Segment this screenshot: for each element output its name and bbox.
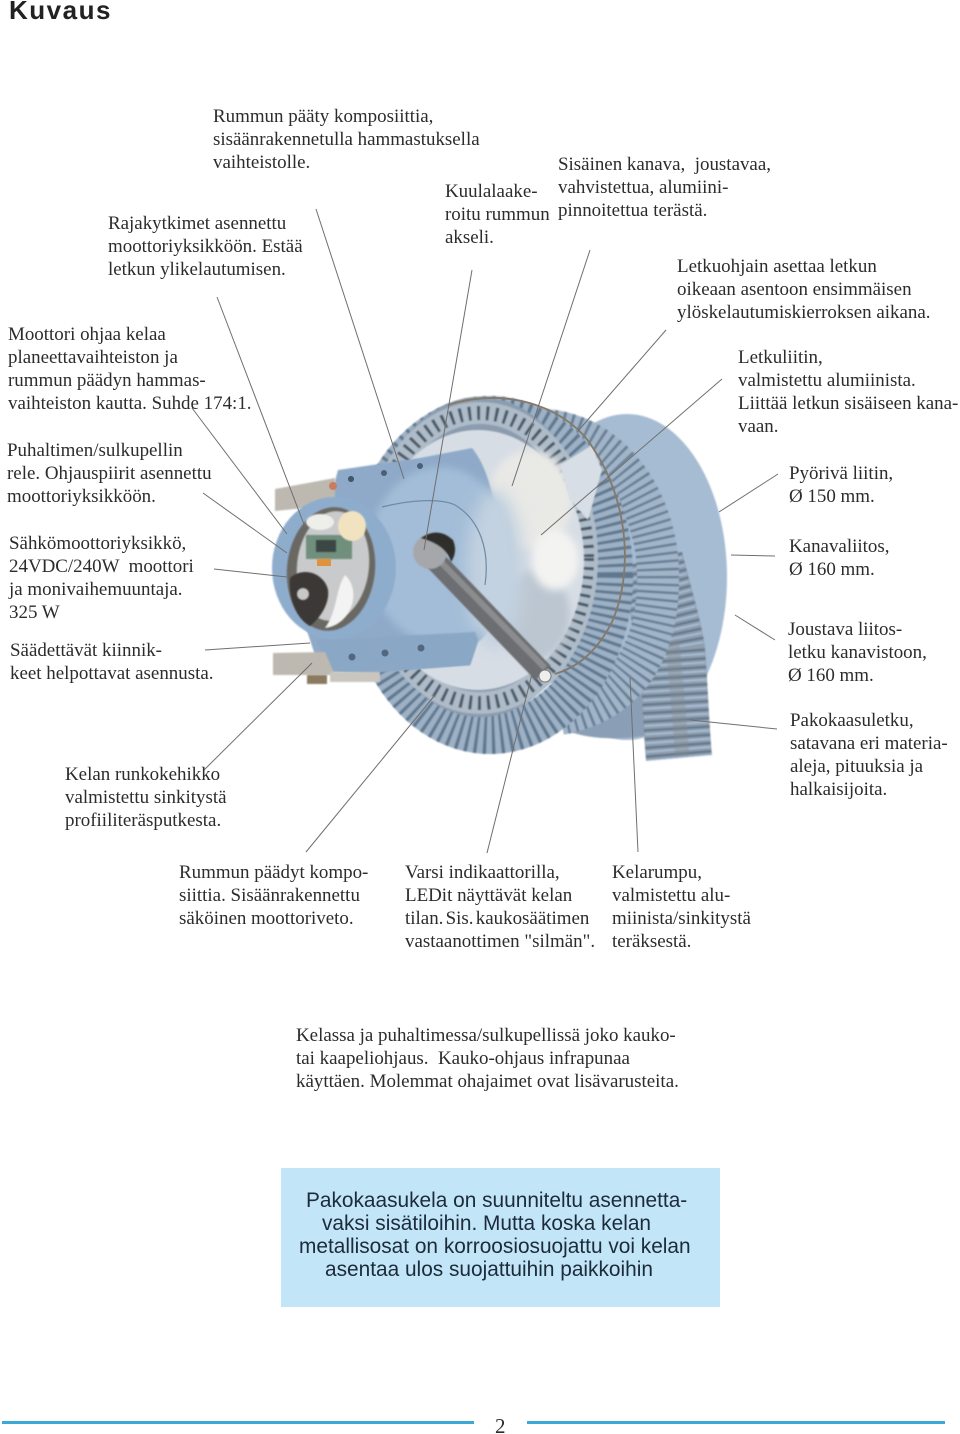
arm tip [539,670,551,682]
lower plate bolts [348,644,424,660]
arm knob [413,535,447,569]
footer rule left [2,1421,474,1424]
lower rear shadow [560,690,660,738]
electric motor [290,572,328,626]
leader: Säädettävät kiinnikkeet [205,643,310,650]
top plate bolts [348,463,423,482]
brass fitting [307,675,327,684]
callout line 2: vaksi sisätiloihin. Mutta koska kelan [322,1212,651,1235]
rear drum disc [527,414,727,740]
leader: Rajakytkimet [217,297,305,527]
inner hose coil [368,417,612,733]
leader: Kelan runkokehikko [204,663,312,770]
label: Letkuliitin: Letkuliitin, valmistettu alumiinista. Liittää letkun sisäiseen kana- vaan. [738,347,958,437]
label: Kelarumpu: Kelarumpu, valmistettu alu- miinista/sinkitystä teräksestä. [612,862,751,952]
label: Kelan runkokehikko: Kelan runkokehikko valmistettu sinkitystä profiiliteräsputkesta. [65,764,226,831]
label: Rummun päädyt: Rummun päädyt kompo- siittia. Sisäänrakennettu säköinen moottoriveto. [179,862,368,929]
label: Letkuohjain: Letkuohjain asettaa letkun oikeaan asentoon ensimmäisen ylöskelautumiskierroksen aikana. [677,256,930,323]
leader: Letkuliitin [541,379,722,535]
text: remote control note: Kelassa ja puhaltimessa/sulkupellissä joko kauko- tai kaapeliohjaus. Kauko-ohjaus infrapunaa käyttäen. Molemmat ohajaimet ovat lisävarusteita. [296,1025,679,1092]
pale highlight [338,511,366,541]
label: Joustava liitosletku: Joustava liitos- letku kanavistoon, Ø 160 mm. [788,619,927,686]
status lamps [329,476,354,490]
leader: Pakokaasuletku [690,720,777,729]
leader: Moottori ohjaa [192,408,287,534]
guide wire [448,398,625,674]
leader: Pyörivä liitin [719,474,778,512]
leader: Varsi [487,670,533,853]
callout line 1: Pakokaasukela on suunniteltu asennetta- [306,1189,687,1212]
label: Säädettävät kiinnikkeet: Säädettävät kiinnik- keet helpottavat asennusta. [10,640,214,684]
label: Sisäinen kanava: Sisäinen kanava, joustavaa, vahvistettua, alumiini- pinnoitettua terästä. [558,154,771,221]
hose guide bracket [560,445,602,520]
leader: Rummun päädyt [306,695,435,852]
label: Kuulalaakeroitu akseli: Kuulalaake- roitu rummun akseli. [445,181,550,248]
leader: Kanavaliitos [731,555,775,556]
label: Moottori ohjaa kelaa: Moottori ohjaa kelaa planeettavaihteiston ja rummun päädyn hammas- vaihteiston kautta. Suhde 174:1. [8,324,252,414]
label: Puhaltimen rele: Puhaltimen/sulkupellin rele. Ohjauspiirit asennettu moottoriyksikköön. [7,440,212,507]
motor housing [272,497,396,639]
motor window [281,503,381,635]
label: Rajakytkimet: Rajakytkimet asennettu moottoriyksikköön. Estää letkun ylikelautumisen. [108,213,303,280]
callout line 4: asentaa ulos suojattuihin paikkoihin [325,1258,653,1281]
circuit board [306,535,352,559]
hose arm [428,549,545,673]
callout line 3: metallisosat on korroosiosuojattu voi kelan [299,1235,691,1258]
outer hose coil [530,430,658,714]
leader: Rummun pääty [316,209,404,479]
leader: Letkuohjain [578,330,666,431]
lower plate bar [316,632,478,673]
leader: Sisäinen kanava [512,250,590,486]
label: Varsi: Varsi indikaattorilla, LEDit näyttävät kelan tilan. Sis. kaukosäätimen vastaanottimen "silmän". [405,862,595,952]
leader: Kuulalaakeroitu [424,270,472,550]
plate edge line [382,501,486,585]
leader: Puhaltimen rele [203,493,287,553]
label: Pakokaasuletku: Pakokaasuletku, satavana eri materia- aleja, pituuksia ja halkaisijoita. [790,710,948,800]
front plate [300,448,501,673]
centre disc [368,467,512,643]
leader: Joustava liitosletku [735,615,775,640]
drum rim [367,397,593,717]
callout: indoor installation [281,1168,720,1307]
label: Pyörivä liitin: Pyörivä liitin, Ø 150 mm. [789,463,893,507]
label: Rummun pääty: Rummun pääty komposiittia, sisäänrakennetulla hammastuksella vaihteistolle. [213,106,480,173]
label: Kanavaliitos: Kanavaliitos, Ø 160 mm. [789,536,889,580]
footer rule right [527,1421,945,1424]
hanging hose [650,560,682,758]
leader: Kelarumpu [630,678,638,852]
motor window white sheen [325,575,353,628]
orange relay [317,559,331,566]
label: Sähkömoottoriyksikkö: Sähkömoottoriyksikkö, 24VDC/240W moottori ja monivaihemuuntaja. 325 W [9,533,194,623]
plate panel fade [467,490,523,650]
drum interior silver [372,430,584,690]
leader: Sähkömoottoriyksikkö [214,569,287,577]
mounting brackets [273,478,380,682]
